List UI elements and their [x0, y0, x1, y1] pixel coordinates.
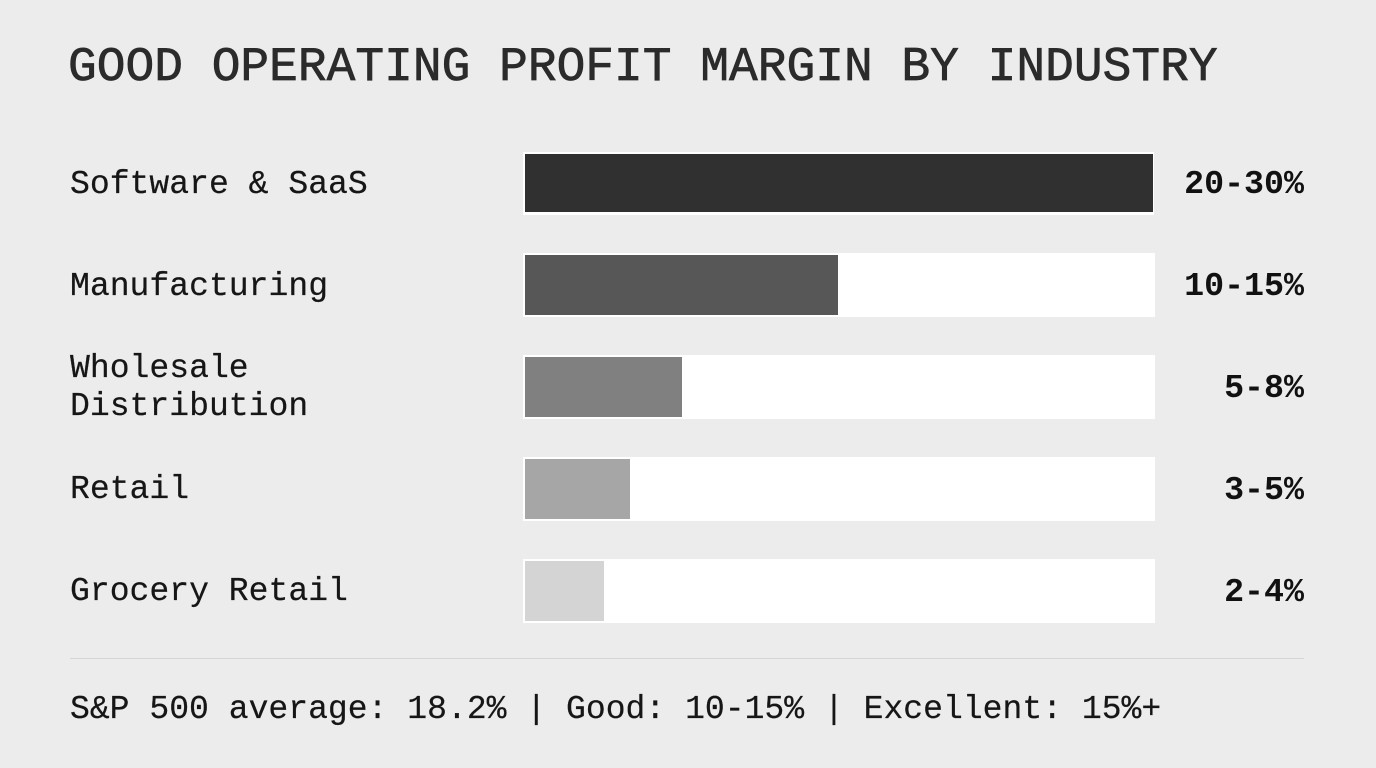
label: Wholesale Distribution: Wholesale — [70, 349, 249, 387]
bar row: Wholesale Distribution — [70, 349, 1304, 425]
label: Manufacturing: Manufacturing — [70, 267, 328, 305]
label: Retail: Retail — [70, 470, 189, 508]
bar row: Software & SaaS — [70, 152, 1304, 215]
label: Wholesale Distribution: Distribution — [70, 387, 308, 425]
value: 5-8%: 5-8% — [1224, 369, 1304, 407]
value: 2-4%: 2-4% — [1224, 573, 1304, 611]
bar: 20-30% — [523, 152, 1154, 215]
value: 3-5%: 3-5% — [1224, 471, 1304, 509]
value: 20-30%: 20-30% — [1184, 165, 1304, 203]
bar row: Grocery Retail — [70, 559, 1304, 623]
label: Grocery Retail: Grocery Retail — [70, 572, 348, 610]
bar: 10-15% — [523, 253, 1155, 317]
bar: 2-4% — [523, 559, 1155, 623]
bar row: Manufacturing — [70, 253, 1304, 317]
title: GOOD OPERATING PROFIT MARGIN BY INDUSTRY — [68, 41, 1218, 95]
footer note: S&P 500 average: 18.2% | Good: 10-15% | Excellent: 15%+ — [70, 690, 1161, 728]
bar: 5-8% — [523, 355, 1155, 419]
value: 10-15%: 10-15% — [1184, 267, 1304, 305]
label: Software & SaaS: Software & SaaS — [70, 165, 368, 203]
bar row: Retail — [70, 457, 1304, 521]
bar: 3-5% — [523, 457, 1155, 521]
label: Wholesale Distribution — [70, 349, 308, 425]
